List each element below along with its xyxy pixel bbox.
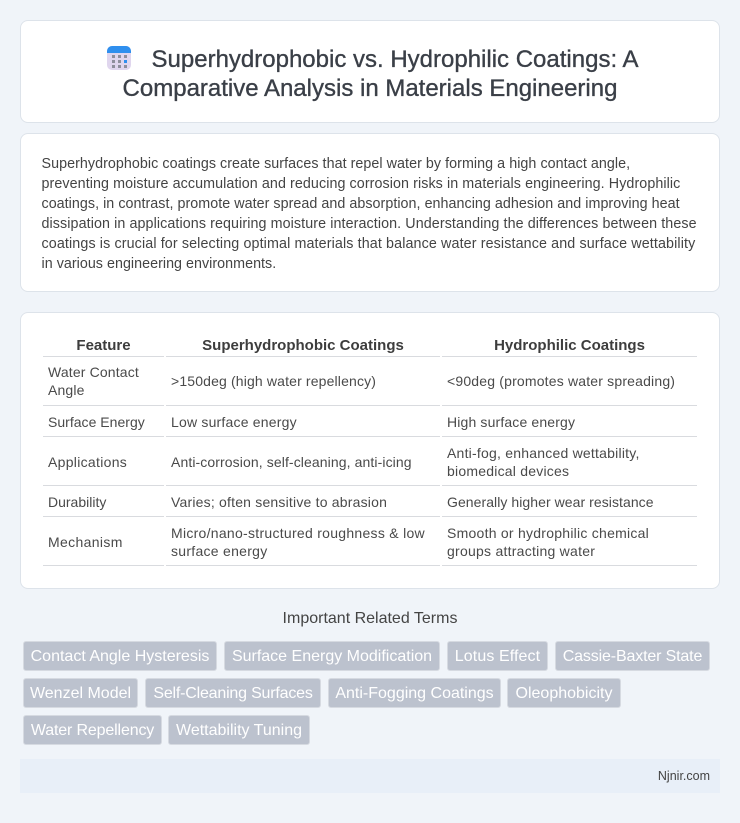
intro paragraph: coatings is crucial for selecting optimal materials that balance water resistance and surface wettability	[42, 236, 695, 252]
intro paragraph: dissipation in applications requiring moisture interaction. Understanding the differences between these	[42, 216, 697, 232]
value: hydrophilic mechanism: groups attracting water	[447, 543, 595, 559]
comparison table panel	[20, 312, 720, 589]
icon: calendar	[107, 46, 131, 70]
row: surface energy: Surface Energy	[48, 414, 145, 430]
tag	[23, 715, 162, 745]
tag: Lotus Effect	[455, 648, 540, 665]
tag: Surface Energy Modification	[232, 648, 432, 665]
intro paragraph: preventing moisture accumulation and reducing corrosion risks in materials engineering. Hydrophilic	[42, 176, 680, 192]
table header: feature: Feature	[76, 337, 131, 354]
tag	[507, 678, 621, 708]
value: hydrophilic applications: biomedical devices	[447, 463, 569, 479]
intro paragraph: coatings, in contrast, promote water spread and absorption, enhancing adhesion and improving heat	[42, 196, 680, 212]
tag	[328, 678, 501, 708]
value: hydrophilic durability: Generally higher wear resistance	[447, 494, 654, 510]
tag: Contact Angle Hysteresis	[31, 648, 209, 665]
row: water contact angle	[48, 364, 139, 398]
row: water contact angle: Angle	[48, 382, 85, 398]
intro paragraph: Superhydrophobic coatings create surfaces that repel water by forming a high contact angle,	[42, 156, 630, 172]
intro paragraph: in various engineering environments.	[42, 256, 276, 272]
value: hydrophilic applications: Anti-fog, enhanced wettability,	[447, 445, 640, 461]
intro paragraph	[42, 156, 697, 272]
value: hydrophilic mechanism: Smooth or hydrophilic chemical	[447, 525, 649, 541]
tag: Water Repellency	[31, 722, 154, 739]
value: superhydrophobic contact angle: >150deg (high water repellency)	[171, 373, 376, 389]
tag	[447, 641, 548, 671]
tag: Self-Cleaning Surfaces	[153, 685, 313, 702]
value: superhydrophobic mechanism: surface energy	[171, 543, 268, 559]
footer bar	[20, 759, 720, 793]
related terms tags	[23, 641, 710, 745]
value: hydrophilic applications	[447, 445, 640, 479]
value: hydrophilic mechanism	[447, 525, 649, 559]
tag	[23, 641, 217, 671]
value: superhydrophobic mechanism: Micro/nano-structured roughness & low	[171, 525, 425, 541]
row: durability: Durability	[48, 494, 106, 510]
tag	[145, 678, 321, 708]
tag: Anti-Fogging Coatings	[335, 685, 494, 702]
row: applications: Applications	[48, 454, 127, 470]
value: superhydrophobic surface energy: Low surface energy	[171, 414, 297, 430]
tag: Wenzel Model	[30, 685, 131, 702]
tag	[224, 641, 440, 671]
title: Comparative Analysis in Materials Engineering	[123, 75, 617, 102]
tag: Oleophobicity	[516, 685, 612, 702]
tag	[23, 678, 138, 708]
title: Superhydrophobic vs. Hydrophilic Coatings: A	[152, 46, 638, 73]
related terms heading: Important Related Terms	[283, 610, 457, 627]
value: hydrophilic surface energy: High surface energy	[447, 414, 575, 430]
tag	[555, 641, 710, 671]
value: superhydrophobic applications: Anti-corrosion, self-cleaning, anti-icing	[171, 454, 412, 470]
table header: superhydrophobic: Superhydrophobic Coatings	[202, 337, 404, 354]
value: superhydrophobic mechanism	[171, 525, 425, 559]
header panel	[20, 20, 720, 123]
value: hydrophilic contact angle: <90deg (promotes water spreading)	[447, 373, 675, 389]
intro text panel	[20, 133, 720, 292]
tag	[168, 715, 310, 745]
table header: hydrophilic: Hydrophilic Coatings	[494, 337, 645, 354]
row: mechanism: Mechanism	[48, 534, 123, 550]
row: water contact angle: Water Contact	[48, 364, 139, 380]
tag: Wettability Tuning	[176, 722, 302, 739]
tag: Cassie-Baxter State	[563, 648, 702, 665]
title	[123, 46, 639, 102]
footer credit: Njnir.com	[658, 769, 710, 783]
value: superhydrophobic durability: Varies; often sensitive to abrasion	[171, 494, 387, 510]
